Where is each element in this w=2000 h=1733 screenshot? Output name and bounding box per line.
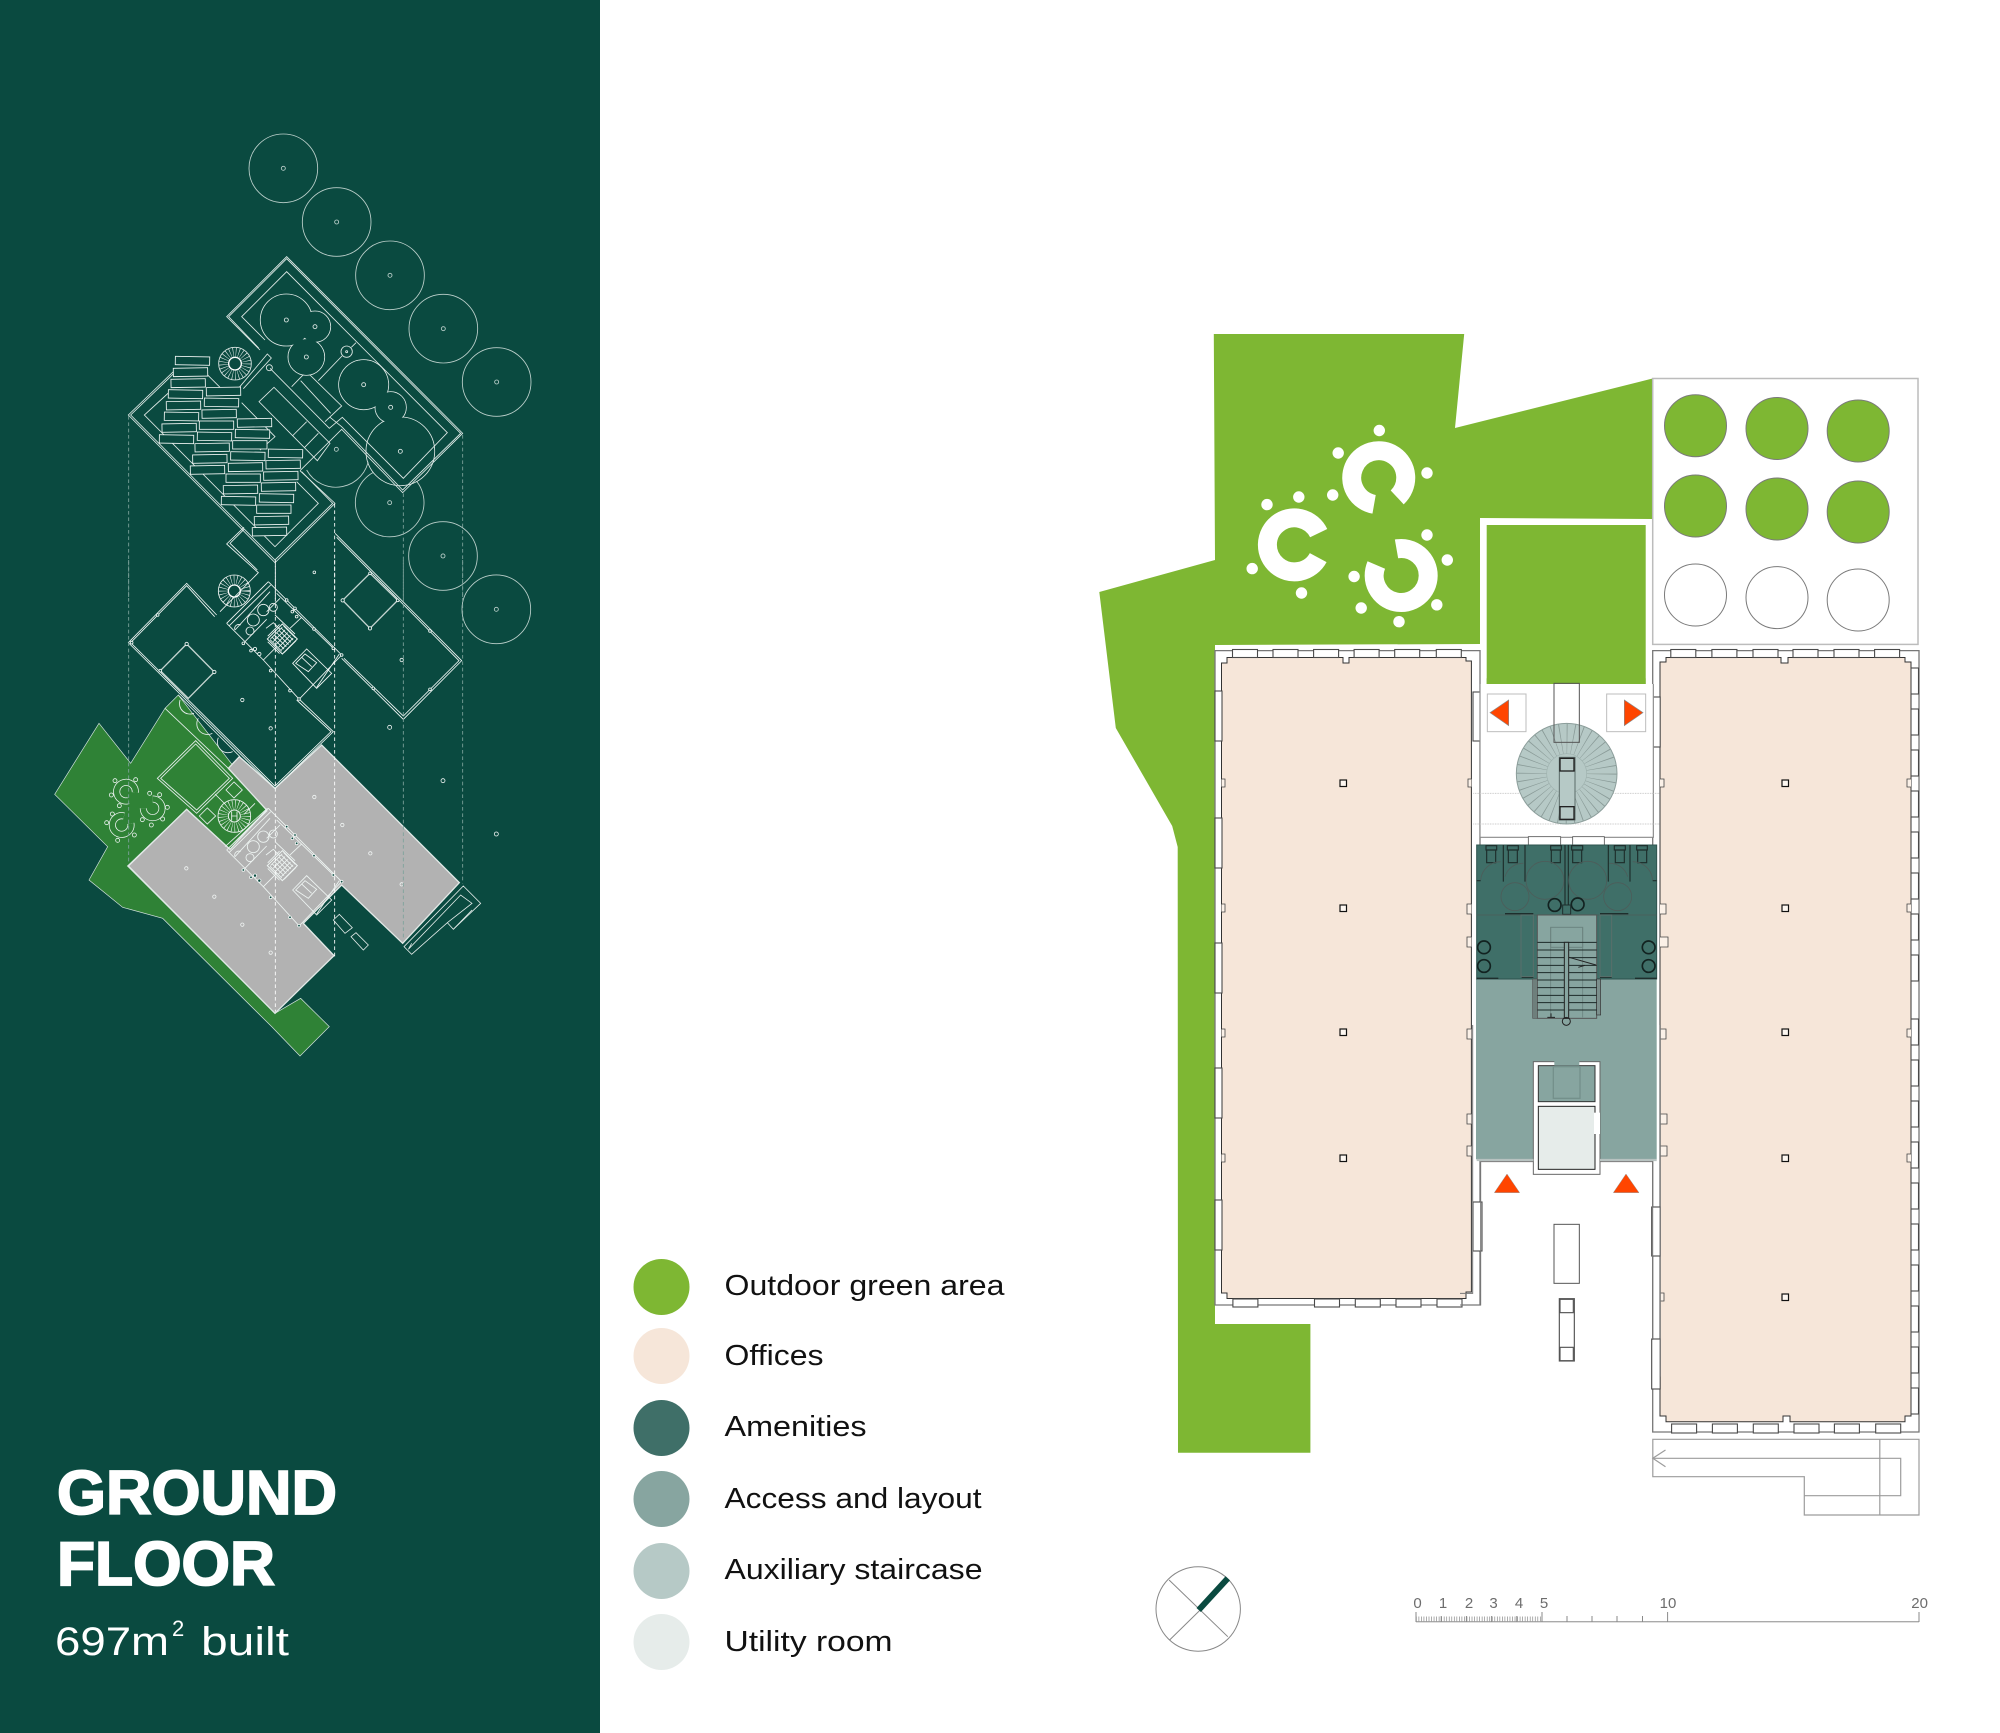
dashed projection lines lower — [129, 560, 463, 1012]
access triangle west — [1494, 1174, 1520, 1193]
wall frame — [1653, 651, 1919, 1432]
axonometric floor stack — [55, 134, 531, 1056]
table ring west — [1267, 518, 1319, 572]
solar panels — [159, 356, 303, 536]
scale labels: 0 — [1413, 1595, 1422, 1612]
court frame — [1480, 684, 1653, 837]
structural columns — [1782, 780, 1788, 1300]
office floor — [1660, 658, 1911, 1422]
scale ticks — [1416, 1612, 1919, 1622]
dotted ground lines — [1473, 793, 1660, 824]
icon: ground picnic tables — [105, 778, 169, 842]
courtyard green square — [1487, 525, 1646, 684]
amenities floor — [1477, 845, 1657, 979]
forecourt wall lines — [1460, 1025, 1660, 1377]
bike rack — [1554, 1224, 1579, 1283]
utility and lift block — [1460, 1025, 1660, 1377]
ground floor grey buildings — [128, 745, 459, 1013]
stairwell — [1521, 915, 1612, 1025]
utility room — [1538, 1106, 1595, 1169]
column dots and dropped tree trunks — [185, 571, 498, 954]
legend item: utility room — [634, 1614, 892, 1670]
first floor east wing — [335, 533, 462, 719]
block walls — [1533, 1062, 1600, 1174]
first floor north connector — [220, 527, 258, 612]
ground floor core plan — [227, 808, 343, 927]
legend item: amenities: Amenities — [724, 1411, 866, 1443]
floor plan — [1099, 334, 1919, 1515]
icon: roof spiral stair — [219, 347, 251, 380]
axonometric: roof level and trees — [128, 134, 531, 644]
office floor — [1222, 658, 1471, 1298]
auxiliary spiral staircase — [1516, 723, 1617, 824]
hall threshold — [1477, 1156, 1657, 1163]
perimeter windows — [1215, 650, 1482, 1307]
bench rectangle — [1554, 683, 1579, 742]
wall pilasters — [1660, 779, 1911, 1301]
legend item: outdoor green area — [634, 1259, 1005, 1315]
legend item: auxiliary staircase — [634, 1543, 982, 1599]
toilet cubicles — [1477, 845, 1657, 905]
scale labels: 20 — [1911, 1595, 1928, 1612]
legend item: access and layout — [634, 1471, 982, 1527]
roof terrace outline — [227, 257, 463, 493]
green courtyard edge — [1487, 678, 1646, 684]
legend item: offices — [634, 1328, 824, 1384]
dashed projection lines upper — [129, 416, 463, 600]
table seats — [1246, 425, 1453, 627]
scale labels: 10 — [1660, 1595, 1676, 1612]
core doors — [1528, 837, 1604, 845]
solar panel block outline — [128, 371, 335, 563]
lift shaft — [1538, 1060, 1595, 1102]
scale labels: 5 — [1540, 1595, 1548, 1612]
wall pilasters — [1222, 779, 1471, 1162]
ramp with arrow — [1653, 1439, 1919, 1515]
table ring south — [1374, 548, 1428, 602]
first floor west wing — [128, 583, 333, 788]
scale labels: 4 — [1515, 1595, 1523, 1612]
icon: row of trees — [249, 134, 531, 644]
title: ground floor: GROUND — [57, 1459, 337, 1528]
icon: ground spiral stair — [218, 800, 251, 832]
office wing west — [1215, 650, 1482, 1307]
axonometric: ground floor site — [55, 571, 498, 1056]
scale labels: 1 — [1439, 1595, 1447, 1612]
legend item: outdoor green area: Outdoor green area — [724, 1270, 1005, 1302]
scale labels: 3 — [1489, 1595, 1498, 1612]
office wing east — [1652, 650, 1919, 1433]
picnic tables — [1246, 425, 1453, 627]
sinks — [1478, 898, 1655, 972]
outdoor green area — [1099, 334, 1653, 1453]
legend item: access and layout: Access and layout — [724, 1483, 982, 1515]
central core upper: entrance court — [1473, 678, 1660, 845]
first floor core plan — [227, 582, 343, 700]
scale labels — [1413, 1595, 1928, 1612]
icon: first floor spiral stair — [218, 575, 250, 607]
title: ground floor: FLOOR — [57, 1530, 275, 1599]
courtyard arrow box east — [1607, 694, 1646, 732]
structural columns — [1340, 780, 1346, 1162]
turning circles — [1477, 861, 1657, 915]
access triangle east — [1613, 1174, 1639, 1193]
icon: terrace planter blobs — [260, 294, 435, 486]
courtyard details — [157, 695, 267, 848]
table ring north — [1352, 451, 1406, 504]
compass — [1156, 1567, 1240, 1651]
subtitle: built area: built — [201, 1620, 289, 1664]
wall frame — [1215, 651, 1480, 1305]
ground floor ramp and parking — [333, 886, 481, 954]
amenities and stair core — [1477, 845, 1657, 1025]
legend — [634, 1259, 1005, 1670]
tree planter box — [1653, 378, 1918, 644]
scale labels: 2 — [1465, 1595, 1473, 1612]
legend item: auxiliary staircase: Auxiliary staircase — [724, 1554, 982, 1586]
scale bar — [1413, 1595, 1928, 1622]
utility door — [1594, 1113, 1600, 1134]
partition lines — [1477, 905, 1657, 978]
legend item: offices: Offices — [724, 1340, 824, 1372]
panel: dark green sidebar — [0, 0, 600, 1733]
legend item: utility room: Utility room — [724, 1626, 892, 1658]
ground floor green site area — [55, 695, 329, 1056]
courtyard arrow box west — [1487, 694, 1526, 732]
axonometric: first floor level — [128, 527, 462, 927]
subtitle: built area: 697m — [55, 1620, 169, 1664]
legend item: amenities — [634, 1400, 866, 1456]
planter — [1559, 1299, 1574, 1361]
perimeter windows — [1652, 650, 1918, 1433]
access and layout hall — [1476, 979, 1657, 1159]
subtitle: built area: 2 — [172, 1616, 184, 1641]
